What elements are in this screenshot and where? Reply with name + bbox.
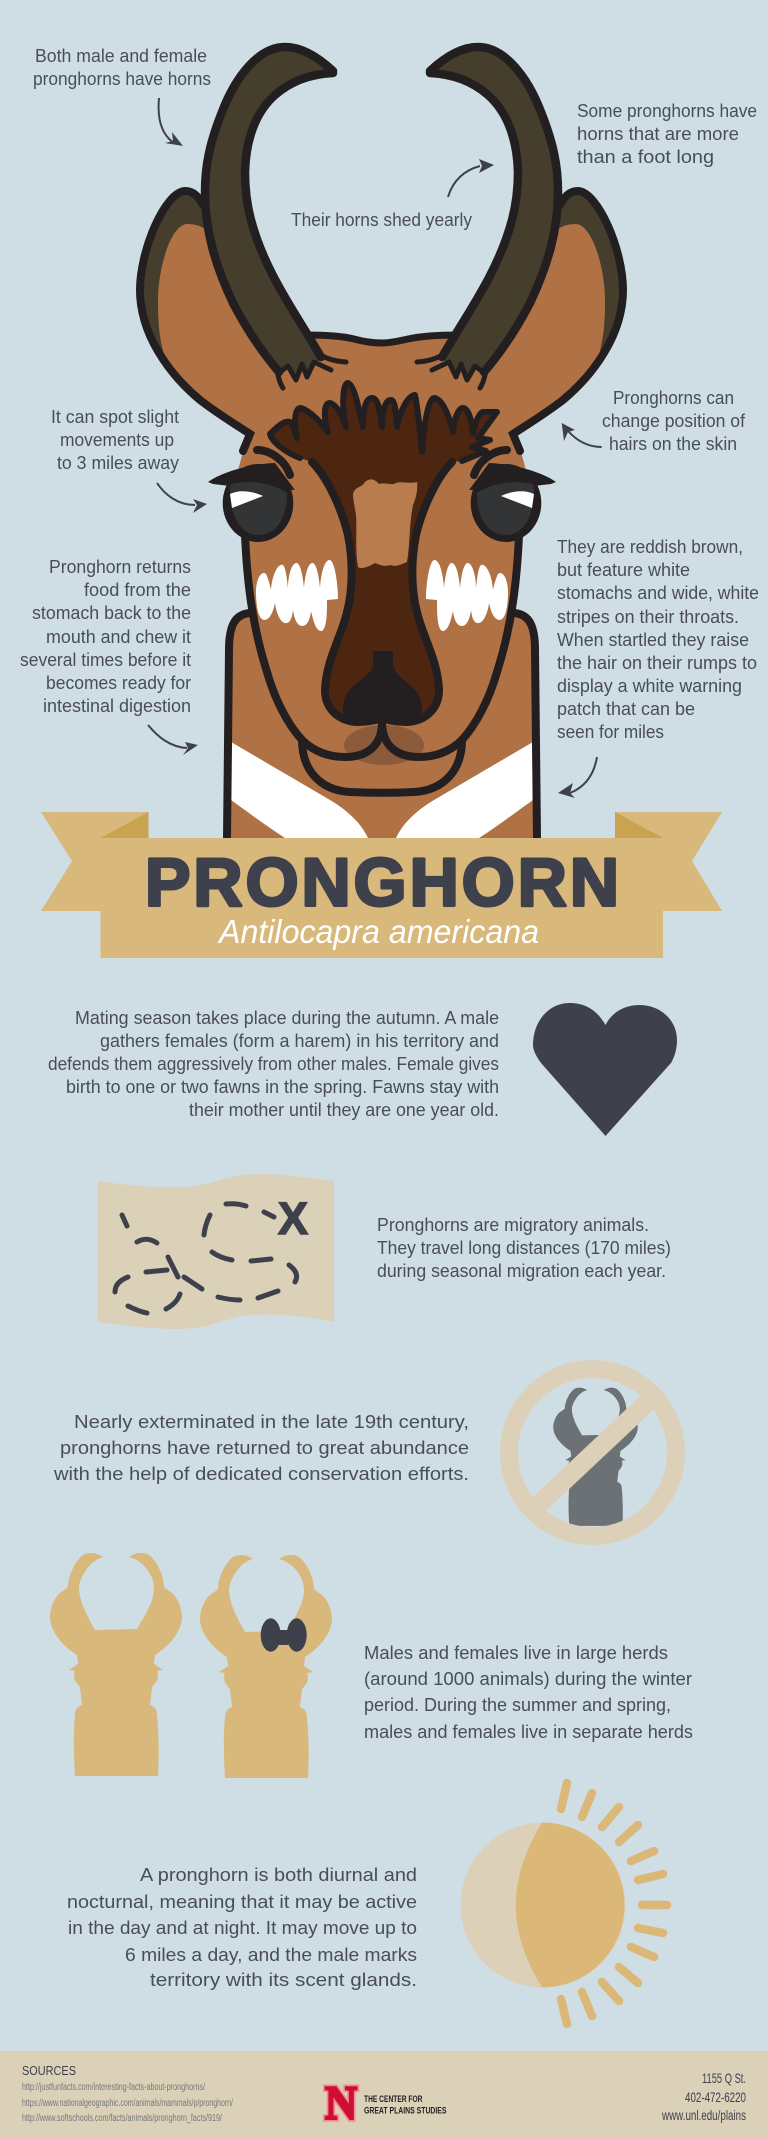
right ear — [513, 191, 623, 451]
sources — [22, 2063, 233, 2124]
callout: foot long horns — [577, 101, 757, 167]
latin name: Antilocapra americana — [217, 913, 539, 950]
callout: digestion: intestinal digestion — [43, 696, 191, 716]
icon: migration map — [98, 1174, 334, 1329]
icon: sun and moon — [460, 1783, 667, 2024]
section: herds text — [364, 1643, 693, 1742]
icon: male silhouette — [50, 1553, 182, 1776]
contact details — [661, 2070, 746, 2123]
icon: female silhouette with bow — [200, 1555, 332, 1778]
callout: eyesight: movements up — [60, 430, 174, 450]
section: conservation text: pronghorns have returned to great abundance — [60, 1438, 469, 1458]
callout: colouring and warning patch: stomachs and wide, white — [557, 583, 759, 603]
section: mating text: Mating season takes place during the autumn. A male — [75, 1008, 499, 1028]
left ear — [140, 191, 250, 451]
center name: THE CENTER FOR — [364, 2094, 423, 2105]
forehead hair outline — [270, 383, 497, 461]
section: day and night text — [67, 1865, 417, 1990]
ribbon body — [100, 838, 663, 958]
callout: digestion: Pronghorn returns — [49, 557, 191, 577]
arrow: to left horn — [159, 98, 183, 146]
section: herds text: males and females live in separate herds — [364, 1722, 693, 1742]
title: PRONGHORN — [145, 844, 619, 920]
left horn — [205, 47, 346, 388]
ribbon tails — [41, 812, 722, 911]
section: conservation text — [53, 1412, 469, 1484]
section: migration text — [377, 1215, 671, 1281]
callout: digestion: food from the — [84, 580, 191, 600]
callout: colouring and warning patch: When startled they raise — [557, 630, 749, 650]
callout: digestion: several times before it — [20, 650, 191, 670]
center name: GREAT PLAINS STUDIES — [364, 2106, 446, 2116]
section: day and night text: nocturnal, meaning that it may be active — [67, 1892, 417, 1912]
sources: http://justfunfacts.com/interesting-facts-about-pronghorns/ — [22, 2082, 205, 2093]
section: conservation text: with the help of dedicated conservation efforts. — [53, 1464, 469, 1484]
title ribbon — [41, 812, 722, 958]
callout: colouring and warning patch: but feature white — [557, 560, 690, 580]
nose bridge and forehead hair fill — [270, 383, 497, 722]
callout: colouring and warning patch — [557, 537, 759, 742]
callout: horns shed yearly: Their horns shed yearly — [291, 210, 472, 230]
section: conservation text: Nearly exterminated in the late 19th century, — [74, 1412, 469, 1432]
callout: foot long horns: Some pronghorns have — [577, 101, 757, 121]
callout: digestion: mouth and chew it — [46, 627, 191, 647]
sources: SOURCES — [22, 2063, 76, 2078]
sources: https://www.nationalgeographic.com/animals/mammals/p/pronghorn/ — [22, 2098, 233, 2109]
section: mating text: their mother until they are one year old. — [189, 1100, 499, 1120]
callout: digestion — [20, 557, 191, 716]
illustration: pronghorn head — [140, 47, 623, 838]
chin shadow — [344, 725, 424, 765]
callout: eyesight: It can spot slight — [51, 407, 179, 427]
callout: colouring and warning patch: the hair on their rumps to — [557, 653, 757, 673]
left eye — [208, 463, 295, 542]
arrow: to neck stripe — [558, 757, 597, 798]
callout: foot long horns: horns that are more — [577, 124, 739, 144]
right teeth — [426, 560, 508, 631]
section: herds text: Males and females live in large herds — [364, 1643, 668, 1663]
callout: colouring and warning patch: patch that can be — [557, 699, 695, 719]
top of head line — [306, 335, 458, 343]
section: mating text: defends them aggressively from other males. Female gives — [48, 1054, 499, 1074]
logo: university N: N — [325, 2077, 357, 2130]
footer panel — [0, 2051, 768, 2138]
icon: heart — [533, 1003, 677, 1136]
section: migration text: during seasonal migration each year. — [377, 1261, 666, 1281]
callout: digestion: stomach back to the — [32, 603, 191, 623]
icon: prohibited pronghorn — [509, 1369, 676, 1536]
callout: hairs on skin — [602, 388, 746, 454]
callout: colouring and warning patch: seen for miles — [557, 722, 664, 742]
icon: migration map: X — [278, 1193, 308, 1244]
arrow: to right horn — [448, 159, 494, 197]
center name — [364, 2094, 446, 2116]
arrow: to ear — [562, 423, 602, 447]
section: migration text: They travel long distances (170 miles) — [377, 1238, 671, 1258]
callout: eyesight — [51, 407, 179, 473]
light patch on nose — [353, 479, 417, 568]
section: day and night text: 6 miles a day, and the male marks — [125, 1945, 417, 1965]
section: mating text: birth to one or two fawns in the spring. Fawns stay with — [66, 1077, 499, 1097]
callout: foot long horns: than a foot long — [577, 147, 714, 167]
arrow: to left eye — [157, 483, 207, 513]
callout: hairs on skin: hairs on the skin — [609, 434, 737, 454]
right horn — [417, 47, 558, 388]
section: mating text — [48, 1008, 499, 1120]
head and neck silhouette — [140, 191, 623, 838]
nostrils — [343, 651, 422, 722]
logo: university N: N — [325, 2077, 357, 2130]
callout: colouring and warning patch: stripes on their throats. — [557, 607, 739, 627]
sources: http://www.softschools.com/facts/animals/pronghorn_facts/919/ — [22, 2113, 222, 2124]
section: migration text: Pronghorns are migratory animals. — [377, 1215, 649, 1235]
section: herds text: period. During the summer and spring, — [364, 1695, 671, 1715]
arrow: to cheek — [148, 725, 198, 755]
left teeth — [256, 560, 338, 631]
callout: both sexes have horns: Both male and female — [35, 46, 207, 66]
section: day and night text: A pronghorn is both diurnal and — [140, 1865, 417, 1885]
callout: colouring and warning patch: They are reddish brown, — [557, 537, 743, 557]
callout: hairs on skin: change position of — [602, 411, 746, 431]
callout: eyesight: to 3 miles away — [57, 453, 179, 473]
section: mating text: gathers females (form a harem) in his territory and — [100, 1031, 499, 1051]
ribbon folds — [100, 812, 663, 838]
contact details: 1155 Q St. — [702, 2070, 746, 2086]
section: day and night text: territory with its scent glands. — [150, 1970, 417, 1990]
section: herds text: (around 1000 animals) during the winter — [364, 1669, 692, 1689]
section: day and night text: in the day and at night. It may move up to — [68, 1918, 417, 1938]
right eye — [469, 463, 556, 542]
white throat stripes — [231, 742, 533, 838]
face outlines — [227, 450, 537, 838]
callout: both sexes have horns: pronghorns have horns — [33, 69, 211, 89]
callout: colouring and warning patch: display a white warning — [557, 676, 742, 696]
callout: digestion: becomes ready for — [46, 673, 191, 693]
callout: both sexes have horns — [33, 46, 211, 89]
callout: hairs on skin: Pronghorns can — [613, 388, 734, 408]
